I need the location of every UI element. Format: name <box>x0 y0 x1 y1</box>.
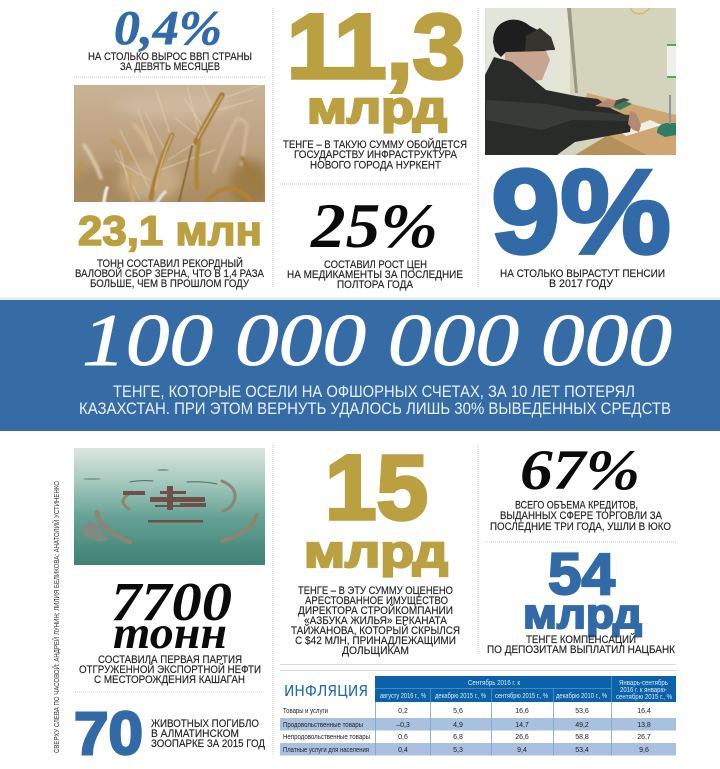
number 23,1 млн: 23,1 млн <box>78 207 262 254</box>
number 9%: 9% <box>491 145 671 279</box>
caption: С МЕСТОРОЖДЕНИЯ КАШАГАН <box>94 674 245 686</box>
number 100 000 000 000: 100 000 000 000 <box>82 300 672 382</box>
caption: ДОЛЬЩИКАМ <box>342 645 409 657</box>
table rows: 0,2 <box>398 708 408 715</box>
stat: 11,3 млрд <box>283 0 467 172</box>
table header: сентябрю 2015 г., % <box>495 692 548 700</box>
unit млрд: млрд <box>523 590 642 637</box>
number 70: 70 <box>74 700 143 767</box>
table rows: 26,7 <box>637 734 651 741</box>
table rows: 53,6 <box>575 708 589 715</box>
table title: ИНФЛЯЦИЯ <box>284 682 368 700</box>
caption: ТЕНГЕ – В ЭТУ СУММУ ОЦЕНЕНО <box>298 585 453 597</box>
table rows: Платные услуги для населения <box>283 747 369 754</box>
caption <box>490 500 671 533</box>
caption: В АЛМАТИНСКОМ <box>151 728 239 740</box>
table rows: 5,6 <box>453 708 463 715</box>
stat: 70 animals <box>74 700 265 767</box>
caption: ЗА ДЕВЯТЬ МЕСЯЦЕВ <box>120 61 220 73</box>
stat: 0,4% GDP growth <box>88 0 252 73</box>
table rows: Товары и услуги <box>283 708 328 715</box>
stat: 25% <box>287 191 463 291</box>
banner caption <box>79 382 671 418</box>
caption: ОТГРУЖЕННОЙ ЭКСПОРТНОЙ НЕФТИ <box>79 663 261 676</box>
number 15: 15 <box>325 437 428 539</box>
table rows: 49,2 <box>575 722 589 729</box>
table rows: 9,6 <box>639 747 649 754</box>
caption: ПО ДЕПОЗИТАМ ВЫПЛАТИЛ НАЦБАНК <box>487 644 676 656</box>
banner caption: ТЕНГЕ, КОТОРЫЕ ОСЕЛИ НА ОФШОРНЫХ СЧЕТАХ, ЗА 10 ЛЕТ ПОТЕРЯЛ <box>113 382 635 401</box>
caption: ТАЙЖАНОВА, КОТОРЫЙ СКРЫЛСЯ <box>291 624 460 637</box>
caption: ВСЕГО ОБЪЕМА КРЕДИТОВ, <box>515 500 638 512</box>
table: inflation <box>280 676 676 756</box>
number 54: 54 <box>548 542 615 607</box>
caption <box>75 257 265 290</box>
caption <box>487 633 676 656</box>
number 7700: 7700 <box>111 571 232 632</box>
panel: blue banner with 100 billion <box>0 300 720 431</box>
unit млрд: млрд <box>307 82 447 133</box>
caption: ТЕНГЕ – В ТАКУЮ СУММУ ОБОЙДЕТСЯ <box>283 138 467 151</box>
photo: Kashagan offshore field <box>74 448 265 565</box>
table header: августу 2016 г., % <box>380 693 426 700</box>
unit млрд: млрд <box>304 526 448 577</box>
caption <box>500 268 665 290</box>
stat: 54 млрд <box>487 542 676 656</box>
caption: СОСТАВИЛА ПЕРВАЯ ПАРТИЯ <box>98 654 242 666</box>
table rows: 0,6 <box>398 734 408 741</box>
stat: 23,1 млн <box>75 207 265 290</box>
table header: Сентябрь 2016 г. к <box>468 679 521 687</box>
caption <box>287 259 463 291</box>
table header <box>375 676 676 702</box>
caption: С $42 МЛН, ПРИНАДЛЕЖАЩИМИ <box>295 635 456 647</box>
table rows: 6,8 <box>453 734 463 741</box>
caption: НА СТОЛЬКО ВЫРАСТУТ ПЕНСИИ <box>500 268 665 280</box>
number 25%: 25% <box>310 191 438 261</box>
photo credit: СВЕРХУ СЛЕВА ПО ЧАСОВОЙ: АНДРЕЙ ЛУНИН; ЛИЛИЯ БЕЛИКОВА; АНАТОЛИЙ УСТИНЕНКО <box>52 481 61 753</box>
caption <box>88 51 252 73</box>
table rows: 58,8 <box>575 734 589 741</box>
table rows: 53,4 <box>575 747 589 754</box>
table rows: 4,9 <box>453 722 463 729</box>
table rows: 5,3 <box>453 747 463 754</box>
caption: АРЕСТОВАННОЕ ИМУЩЕСТВО <box>305 595 448 607</box>
caption: БОЛЬШЕ, ЧЕМ В ПРОШЛОМ ГОДУ <box>90 278 250 290</box>
caption: ВЫДАННЫХ СФЕРЕ ТОРГОВЛИ ЗА <box>500 510 663 522</box>
table header: 2016 г. к январю- <box>620 687 668 694</box>
caption: ЖИВОТНЫХ ПОГИБЛО <box>151 718 259 730</box>
caption: ТЕНГЕ КОМПЕНСАЦИЙ <box>526 633 636 646</box>
caption: ПОСЛЕДНИЕ ТРИ ГОДА, УШЛИ В ЮКО <box>490 521 671 533</box>
photo: pensioner at a bank counter <box>485 8 676 160</box>
table rows: 16,4 <box>637 708 651 715</box>
table rows: Непродовольственные товары <box>283 734 370 741</box>
caption: ДИРЕКТОРА СТРОЙКОМПАНИИ <box>298 604 453 617</box>
unit тонн: тонн <box>113 607 227 659</box>
table rows: 0,4 <box>398 747 408 754</box>
caption <box>151 718 265 750</box>
stat: 9% <box>491 145 671 290</box>
caption: В 2017 ГОДУ <box>549 278 614 290</box>
table header: декабрю 2010 г., % <box>556 692 607 700</box>
caption <box>291 585 460 657</box>
caption: СОСТАВИЛ РОСТ ЦЕН <box>324 259 427 271</box>
caption: НОВОГО ГОРОДА НУРКЕНТ <box>310 160 441 172</box>
stat: 67% <box>490 439 671 533</box>
number 0,4%: 0,4% <box>114 0 222 55</box>
table rows <box>280 702 676 756</box>
caption: НА СТОЛЬКО ВЫРОС ВВП СТРАНЫ <box>88 51 252 63</box>
table rows: 9,4 <box>517 747 527 754</box>
table rows: 13,8 <box>637 722 651 729</box>
caption: ГОСУДАРСТВУ ИНФРАСТРУКТУРА <box>294 149 458 161</box>
caption <box>79 654 261 686</box>
stat: 7700 тонн <box>79 571 261 686</box>
caption: ТОНН СОСТАВИЛ РЕКОРДНЫЙ <box>97 257 243 270</box>
caption: НА МЕДИКАМЕНТЫ ЗА ПОСЛЕДНИЕ <box>287 269 463 281</box>
number 67%: 67% <box>520 439 640 502</box>
caption <box>283 138 467 172</box>
table header: декабрю 2015 г., % <box>435 692 486 700</box>
caption: «АЗБУКА ЖИЛЬЯ» ЕРКАНАТА <box>304 615 448 627</box>
table rows: Продовольственные товары <box>283 722 363 729</box>
table header: Январь-сентябрь <box>619 679 668 687</box>
table rows: –0,3 <box>396 722 410 729</box>
table rows: 14,7 <box>515 722 529 729</box>
caption: ПОЛТОРА ГОДА <box>337 279 414 291</box>
caption: ЗООПАРКЕ ЗА 2015 ГОД <box>151 738 265 750</box>
stat: 15 млрд <box>291 437 460 657</box>
photo: wheat field <box>70 84 270 210</box>
caption: ВАЛОВОЙ СБОР ЗЕРНА, ЧТО В 1,4 РАЗА <box>75 267 265 280</box>
table rows: 26,6 <box>515 734 529 741</box>
table header: сентябрю 2015 г., % <box>616 693 672 701</box>
table rows: 16,6 <box>515 708 529 715</box>
